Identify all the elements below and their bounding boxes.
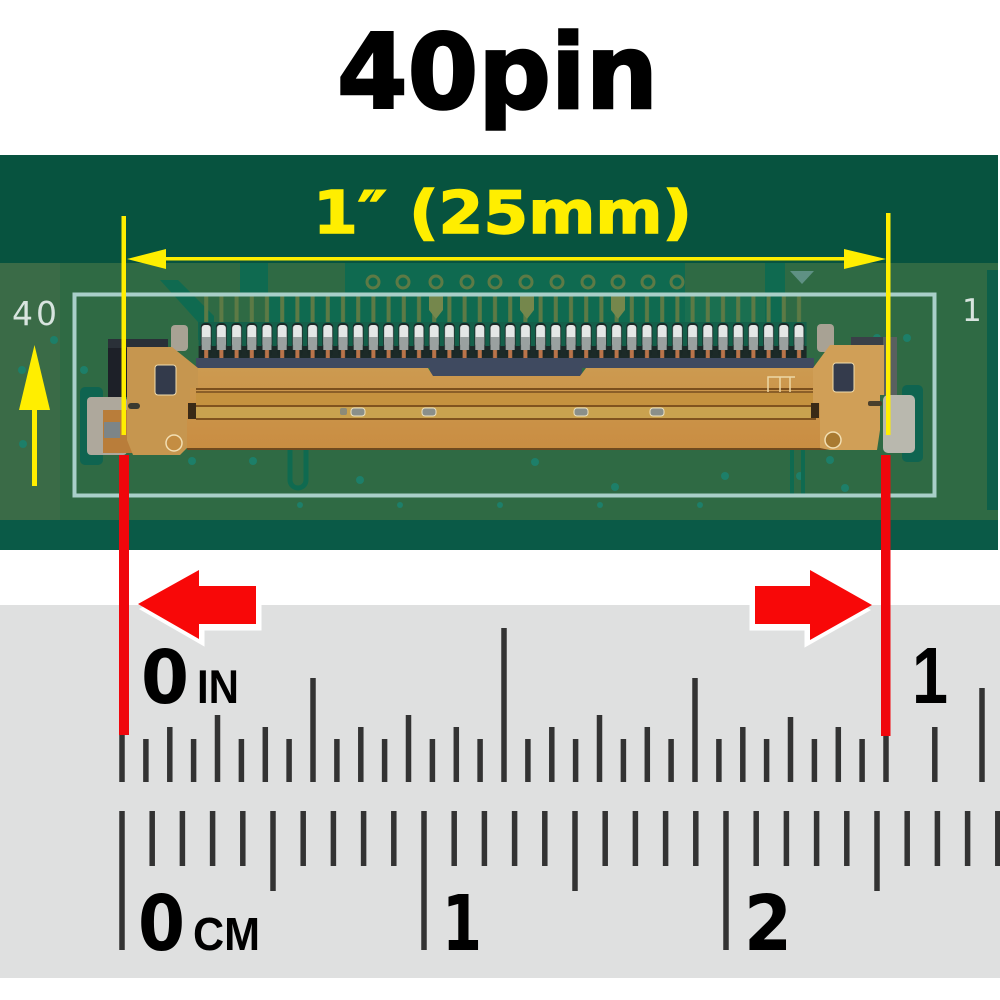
centimetre scale ticks: [122, 811, 998, 950]
connector: [87, 322, 915, 455]
shell slots: [340, 377, 795, 416]
shell grooves: [187, 388, 827, 450]
red measure line left: [119, 455, 129, 735]
silkscreen label 1: 1: [962, 293, 982, 329]
contact pins: [199, 322, 807, 360]
inch scale ticks: [122, 628, 982, 782]
left ear details: [127, 347, 198, 455]
cm label 1: 1: [442, 880, 482, 969]
slate housing: [196, 358, 814, 376]
cm label 2: 2: [744, 880, 792, 969]
dimension label: 1″ (25mm): [313, 178, 692, 247]
silkscreen label 40: 40: [12, 294, 57, 333]
gold metal shell: [187, 368, 820, 450]
inch label 1: 1: [912, 631, 948, 720]
panel: ruler: [0, 605, 1000, 978]
icon: pin direction arrow: [19, 345, 50, 486]
solder tab right: [851, 337, 915, 453]
inch label 0: 0: [141, 635, 189, 721]
inch unit: IN: [197, 660, 239, 713]
cm label 0: 0: [138, 880, 185, 969]
red measure line right: [881, 455, 890, 736]
arrow: red left: [138, 570, 260, 644]
solder tab left: [87, 339, 168, 455]
end pins: [171, 324, 834, 352]
dimension arrow: [122, 213, 890, 435]
arrow: red right: [751, 570, 872, 645]
silkscreen frame: [74, 294, 934, 496]
traces and vias: [18, 263, 923, 508]
title: 40pin: [337, 13, 658, 133]
right ear details: [811, 345, 884, 450]
panel: circuit board photo: [0, 155, 998, 550]
cm unit: CM: [193, 908, 260, 960]
